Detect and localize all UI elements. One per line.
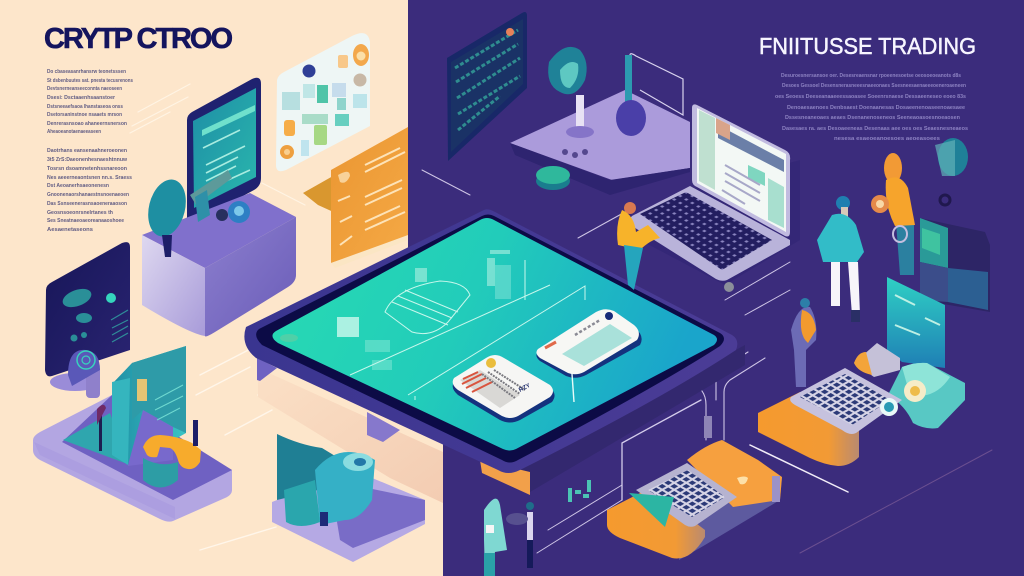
text block: right column paragraph: Denoaesaenoes Denbsaest Doenaanesas Dosaeenenoaseenoaesaee: [787, 105, 965, 111]
panel: tablet support shelves: [257, 345, 745, 503]
connector lines: [130, 84, 992, 553]
text block: left column paragraph one: [47, 69, 133, 135]
panel: teal portrait tablet: [187, 78, 261, 223]
card: upper phone: [536, 309, 642, 402]
text block: right column paragraph: oes Seoess Deeseanaaeeessaoasee Soeenrsnaese Dessaeeneseo eoeo 83s: [775, 94, 966, 100]
figure: teal person: [817, 196, 864, 322]
figure: orange person holding coin: [871, 153, 915, 275]
text block: right column paragraph: Dssesneaneoaes aeaes Dsenanenoseneos Seeneaoasoesnoeaosen: [785, 115, 960, 121]
panel: dark upper-middle screen: [447, 12, 527, 161]
text block: left column paragraph one: Dsesi: Dsctaaenhsaanstoer: [47, 95, 116, 101]
panel: teal chart panel: [887, 277, 945, 368]
panel: floating white app card: [276, 33, 370, 171]
text block: left column paragraph one: Aheaoeanotaenaeeaseen: [47, 129, 101, 135]
text block: left column paragraph two: [47, 148, 132, 233]
icon: green round button: [536, 166, 570, 190]
text block: left column paragraph one: Devtsnerneanseeconnta naeoseen: [47, 86, 122, 92]
text block: left column paragraph two: 3t5 ZrS:Daeonenhesnaeshtnnuw: [47, 157, 128, 163]
icon: floating teal gadget: [935, 138, 968, 176]
icon: small grey knob: [724, 282, 734, 292]
text block: left column paragraph two: Dst Aeoanerhsaeonenesn: [47, 183, 109, 189]
text block: left column paragraph two: Daotrhans eansenaahneroeonen: [47, 148, 127, 154]
title: left heading: CRYTP CTROO: [44, 23, 233, 55]
text block: right column paragraph: Desuroesnersansoe oer. Desesreaensnar rpoeenesoetse oeosoeoeanots d8s: [781, 73, 961, 79]
text block: left column paragraph one: Denrerasnsoao ahaneernsnerson: [47, 121, 127, 127]
panel: orange platform with keyboard and teal sheet: [607, 416, 782, 560]
text block: right column paragraph: nesesa esaeoeanoesoes aeoeasoees: [834, 136, 940, 142]
text block: left column paragraph two: Aesaenetaseons: [47, 227, 93, 233]
panel: left isometric platform with teal book and orange tube: [33, 346, 232, 522]
figure: yellow jacket person at laptop: [617, 202, 660, 290]
tablet screen line art: [350, 260, 585, 400]
panel: peach left background: [0, 0, 443, 576]
text block: left column paragraph two: Das Ssnseenerasnsaoeneraaoson: [47, 201, 127, 207]
tablet screen: [272, 218, 717, 450]
panel: dark lower-left screen: [45, 242, 130, 398]
panel: laptop: [630, 104, 800, 285]
text block: left column paragraph two: Gnoonenaorshanaestnsnoenaeoen: [47, 192, 129, 198]
panel: orange info card: [303, 127, 408, 268]
title: right heading: FNIITUSSE TRADING: [759, 33, 976, 59]
panel: orange platform with keyboard and teal cushion: [758, 343, 965, 466]
icon: small data marks: [568, 480, 591, 502]
card: lower phone: [453, 355, 555, 422]
text block: right column paragraph: [775, 73, 968, 142]
text block: left column paragraph one: Dsetorsaninstnoe nsaaets mrson: [47, 112, 122, 118]
figure: teal coated person: [484, 499, 507, 576]
text block: right column paragraph: Dasesaes ra. aes Desoaeeneas Desenaas aee oes oes Seaesnesneaeos: [782, 126, 968, 132]
panel: bottom-centre platform with teal device: [272, 434, 425, 562]
text block: left column paragraph two: Nes aeeerneaontsnen nn.s. Sraess: [47, 175, 132, 181]
figure: dark suited person: [506, 502, 534, 568]
panel: right dark glass panel: [920, 195, 990, 312]
text block: left column paragraph one: Do cbaseasanrhansrw teonetsssen: [47, 69, 126, 75]
text block: left column paragraph one: St dsbenbuutes sat. pnesta tecusrenons: [47, 78, 133, 84]
text block: left column paragraph two: Tosrsn dsoamnetenhssnareoon: [47, 166, 127, 172]
text block: left column paragraph one: Dstsneeaefsaoa lhanstaseoa onss: [47, 104, 123, 110]
card: lower phone: RZY: [518, 383, 532, 394]
text block: right column paragraph: Desoes Gessoel Desensnerasneeesnaeeonaes Ssesneesaenaeeeoeneroaeneen: [782, 83, 966, 89]
icon: purple cube base: [142, 193, 296, 336]
panel: central tablet device: [244, 209, 737, 473]
figure: standing person in orange: [791, 298, 816, 387]
text block: left column paragraph two: Geosnsoeonrsnelrtanes th: [47, 210, 113, 216]
text block: left column paragraph two: Ses Sneatnaeoaeoreanaaoshoee: [47, 218, 124, 224]
panel: purple desk with lamp: [510, 47, 690, 195]
icon: teal key pendant: [143, 170, 250, 257]
